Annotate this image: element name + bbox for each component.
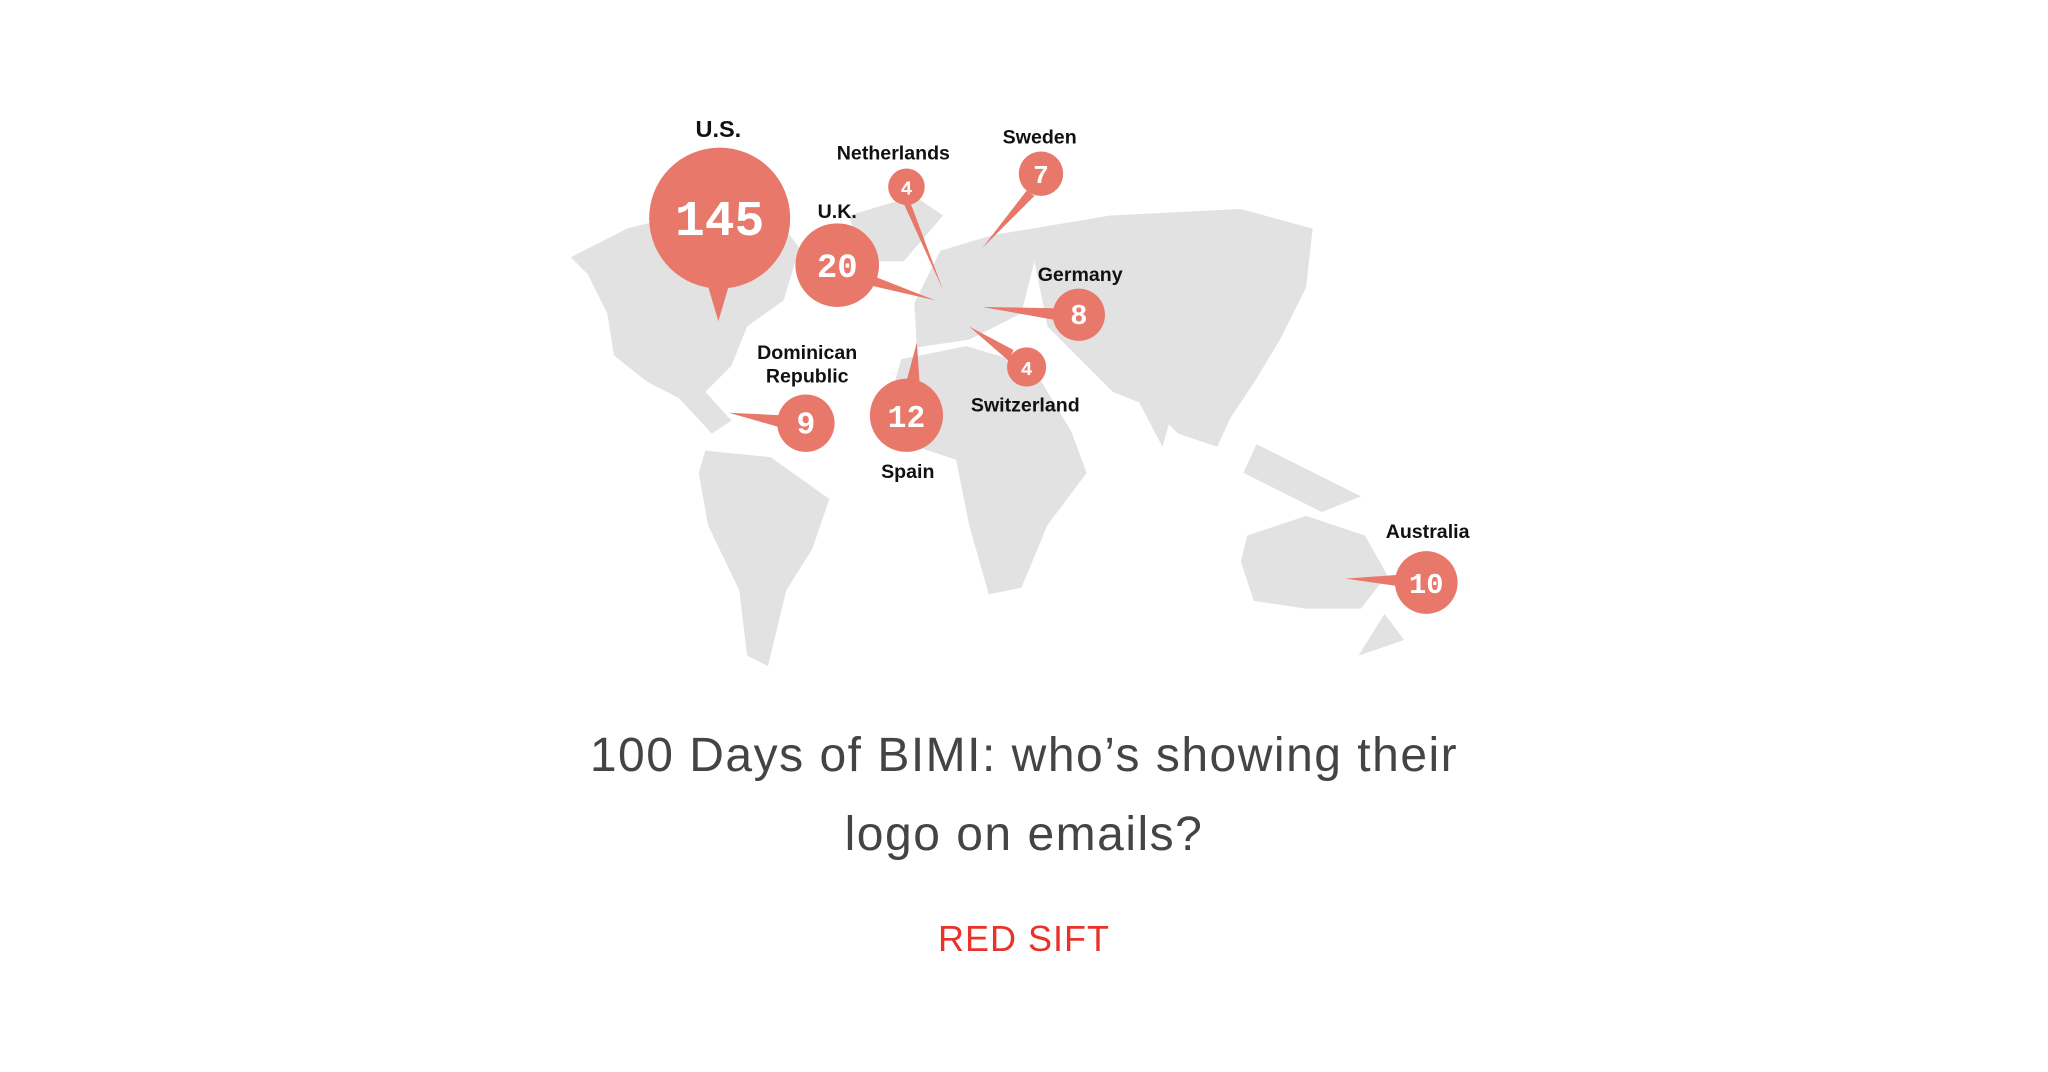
bubble numbers: 7 <box>1033 161 1049 191</box>
bubble numbers: 10 <box>1409 569 1444 602</box>
country labels <box>696 116 1471 543</box>
title: 100 Days of BIMI: who’s showing their <box>590 729 1458 782</box>
bubble numbers: 4 <box>1021 359 1033 381</box>
country labels: Netherlands <box>837 142 950 164</box>
country labels: U.S. <box>696 116 741 142</box>
bubble numbers: 8 <box>1070 300 1087 333</box>
logo: Red Sift: RED SIFT <box>938 918 1110 959</box>
country labels: Republic <box>766 366 849 388</box>
country labels: Australia <box>1386 521 1471 543</box>
title line 2: logo on emails? <box>845 808 1203 861</box>
bubble numbers: 20 <box>817 250 858 288</box>
bubble numbers: 9 <box>796 409 815 444</box>
bubble numbers: 145 <box>675 194 764 250</box>
country labels: U.K. <box>818 201 857 223</box>
pointers <box>705 191 1400 586</box>
world map <box>571 196 1404 666</box>
bubble numbers: 12 <box>888 402 925 437</box>
country labels: Spain <box>881 461 934 483</box>
country labels: Switzerland <box>971 394 1080 416</box>
country labels: Sweden <box>1003 127 1077 149</box>
country labels: Germany <box>1038 264 1123 286</box>
bubble numbers <box>675 161 1444 602</box>
country labels: Dominican <box>757 342 857 364</box>
bubble numbers: 4 <box>901 179 913 201</box>
bubbles <box>649 148 1458 614</box>
